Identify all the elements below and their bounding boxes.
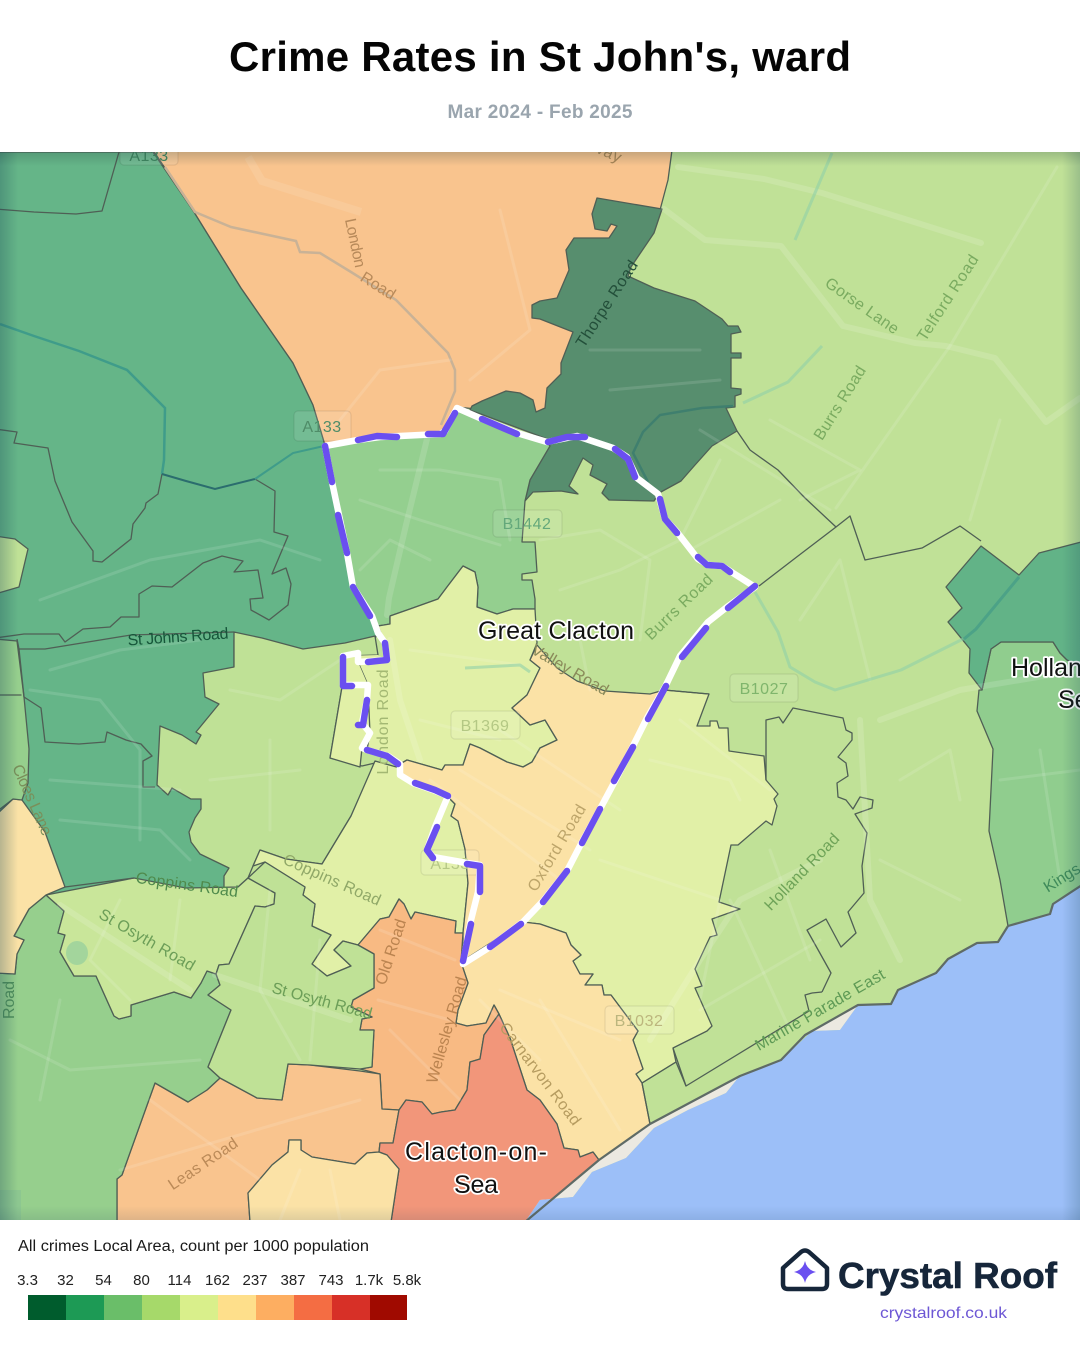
legend scale values: 80 — [133, 1272, 150, 1289]
website: crystalroof.co.uk — [880, 1305, 1008, 1322]
region: Holland-on-Sea mid green — [977, 642, 1080, 926]
region: north-east green patch — [946, 541, 1080, 690]
legend scale values: 114 — [168, 1272, 191, 1289]
road badges: A133 — [129, 148, 169, 165]
road badges: B1032 — [615, 1013, 663, 1030]
region: Great Clacton yellow-green — [358, 566, 557, 770]
road labels — [1, 138, 1080, 1194]
road labels: Coppins Road — [135, 870, 239, 901]
pond — [66, 941, 88, 965]
region: small yellow-green notch — [343, 655, 387, 686]
road labels: Leas Road — [165, 1135, 241, 1194]
road labels: Road — [1, 981, 18, 1019]
road labels: London — [341, 217, 368, 269]
region: Coppins yellow-green — [253, 761, 468, 976]
road labels: Marine Parade East — [752, 966, 889, 1055]
base land: light green areas — [0, 152, 1080, 1220]
beach sand east — [812, 1005, 858, 1031]
legend scale values: 1.7k — [355, 1272, 384, 1289]
legend scale values: 237 — [242, 1272, 268, 1289]
boundaries: east area — [642, 431, 981, 1124]
region: Thorpe Road dark green area — [470, 198, 741, 501]
sea — [525, 883, 1080, 1222]
legend colour bar — [28, 1295, 407, 1320]
road badges: B1027 — [740, 681, 788, 698]
road: pale band in orange area — [248, 157, 361, 212]
road labels: Burrs Road — [642, 571, 717, 644]
road labels: St Johns Road — [127, 625, 229, 650]
river on east patch — [964, 577, 1019, 639]
logo wordmark: Crystal Roof — [838, 1255, 1058, 1296]
legend scale values: 387 — [280, 1272, 306, 1289]
legend scale values: 743 — [318, 1272, 344, 1289]
place labels — [405, 617, 1080, 1199]
road labels: Holland Road — [762, 830, 843, 914]
title: Crime Rates in St John's, ward — [229, 33, 851, 80]
region: south pale block — [248, 1140, 399, 1222]
road labels: Coppins Road — [280, 851, 383, 910]
region: Wellesley orange — [351, 899, 499, 1114]
legend scale values: 3.3 — [17, 1272, 38, 1289]
road labels: Cloes Lane — [8, 762, 55, 838]
road labels: Thorpe Road — [573, 258, 642, 351]
region: Clacton-on-Sea red — [379, 1014, 599, 1222]
region: north orange area — [153, 150, 672, 445]
legend scale values: 162 — [205, 1272, 230, 1289]
ward boundary: white outline — [325, 408, 755, 964]
road network — [10, 167, 1080, 1220]
logo: Crystal Roof — [783, 1250, 1058, 1322]
region: far-left light patch — [0, 536, 28, 594]
ward boundary: purple dashes — [325, 413, 755, 961]
speckled patch — [0, 1190, 21, 1220]
place labels: Sea — [454, 1171, 498, 1199]
road labels: Wellesley Road — [424, 975, 471, 1085]
place labels: Great Clacton — [478, 617, 634, 645]
icon: house with star — [783, 1250, 827, 1289]
region: south-west pale corner — [0, 799, 65, 974]
road badges: B1369 — [461, 718, 509, 735]
road labels: Gorse Lane — [822, 275, 902, 338]
legend scale values — [17, 1272, 422, 1289]
legend title: All crimes Local Area, count per 1000 population — [18, 1238, 369, 1255]
region: St Johns central green — [325, 410, 550, 626]
legend scale values: 32 — [57, 1272, 74, 1289]
river: west watercourse — [0, 324, 324, 489]
region: west light green — [157, 632, 378, 888]
region: St Osyth Road west — [46, 878, 275, 1019]
place labels: Clacton-on- — [405, 1138, 547, 1166]
road labels: Telford Road — [914, 252, 983, 344]
road labels: Old Road — [373, 917, 410, 987]
road badges — [120, 138, 798, 1034]
road badges: A133 — [302, 419, 342, 436]
road labels: St Osyth Road — [270, 980, 374, 1023]
subtitle: date range: Mar 2024 - Feb 2025 — [448, 102, 633, 123]
region: Oxford Road pale orange — [400, 645, 664, 962]
road badges: B1442 — [503, 516, 551, 533]
road labels: Burrs Road — [811, 363, 870, 443]
region: south-west orange — [117, 1064, 399, 1222]
road labels: Carnarvon Road — [495, 1020, 584, 1129]
road labels: London Road — [375, 670, 392, 774]
region: east yellow-green — [523, 690, 778, 1083]
road labels: St Osyth Road — [96, 906, 198, 975]
river in dark area — [633, 406, 733, 482]
region: small yellow-green block — [330, 687, 370, 767]
legend scale values: 54 — [95, 1272, 112, 1289]
coast line — [525, 883, 1080, 1222]
region: south-west mid green — [0, 895, 231, 1222]
road labels: Road — [357, 269, 398, 304]
boundaries: left area — [0, 152, 291, 887]
region: north-west green area — [0, 152, 378, 1000]
road labels: Oxford Road — [525, 802, 590, 895]
legend — [17, 1238, 422, 1320]
road badges: A133 — [430, 856, 470, 873]
road labels: way — [589, 138, 624, 166]
legend scale values: 5.8k — [393, 1272, 422, 1289]
region: south pale orange — [456, 922, 650, 1160]
region: far-left green patch — [0, 639, 29, 813]
beach sand — [525, 1078, 738, 1222]
road labels: Valley Road — [528, 642, 611, 699]
region: St Osyth Road east — [208, 862, 374, 1100]
road: London Road line — [165, 167, 455, 425]
watercourses: east — [465, 153, 963, 690]
